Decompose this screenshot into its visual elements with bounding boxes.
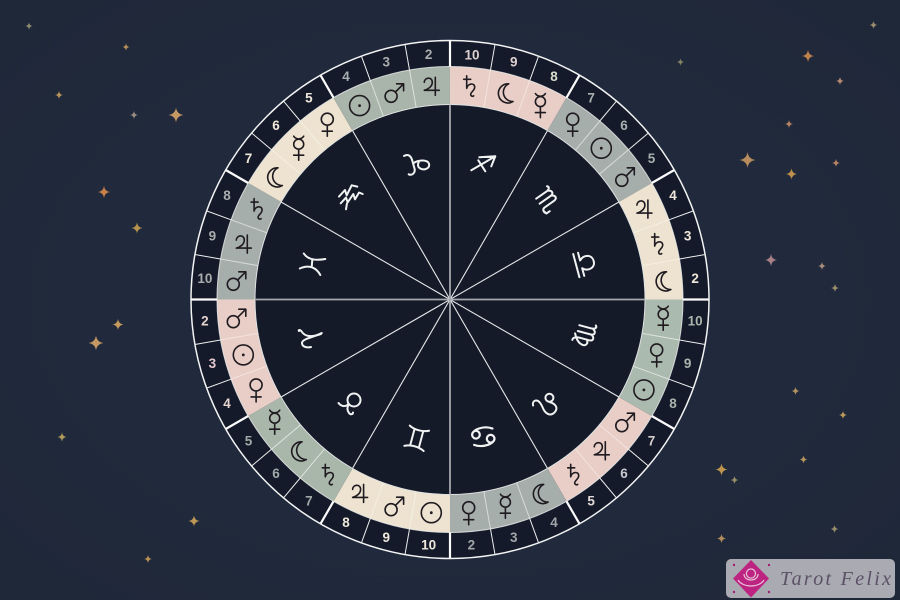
degree numbers band: 7 bbox=[245, 151, 252, 166]
icon: Gemini bbox=[404, 426, 429, 451]
icon: Jupiter bbox=[594, 442, 609, 460]
degree numbers band: 5 bbox=[305, 91, 313, 106]
icon: Venus bbox=[463, 502, 475, 525]
icon: Leo bbox=[531, 389, 562, 420]
icon: Aquarius bbox=[339, 185, 363, 209]
degree numbers band: 5 bbox=[648, 151, 656, 166]
degree numbers band: 4 bbox=[223, 396, 231, 411]
icon: Cancer bbox=[470, 425, 496, 448]
icon: Saturn bbox=[322, 464, 333, 485]
icon: Mars bbox=[385, 84, 404, 102]
icon: Venus bbox=[567, 113, 579, 136]
degree numbers band: 7 bbox=[648, 433, 655, 448]
degree numbers band: 10 bbox=[421, 537, 436, 552]
degree numbers band: 6 bbox=[620, 118, 628, 133]
degree numbers band: 2 bbox=[468, 537, 475, 552]
icon: Jupiter bbox=[637, 200, 652, 218]
degree numbers band: 5 bbox=[587, 494, 595, 509]
degree numbers band: 3 bbox=[510, 530, 518, 545]
ring sector 60-90: cream bbox=[596, 183, 710, 316]
icon: Virgo bbox=[572, 321, 597, 347]
degree numbers band: 9 bbox=[209, 228, 216, 244]
degree numbers band: 4 bbox=[342, 69, 350, 84]
icon: Mars bbox=[616, 413, 634, 432]
icon: Jupiter bbox=[424, 77, 439, 95]
degree numbers band: 3 bbox=[383, 55, 391, 70]
icon: Scorpio bbox=[533, 186, 560, 214]
icon: Pisces bbox=[300, 254, 325, 275]
icon: Mars bbox=[385, 497, 404, 516]
ring sector 0-30: rose bbox=[450, 66, 566, 131]
icon: Mars bbox=[227, 309, 246, 328]
degree numbers band: 6 bbox=[620, 466, 628, 481]
ring sector 150-180: grey bbox=[434, 446, 566, 560]
icon: Taurus bbox=[338, 394, 360, 414]
degree numbers band: 8 bbox=[342, 515, 350, 530]
icon: Moon bbox=[268, 168, 282, 187]
degree numbers band: 2 bbox=[691, 271, 699, 286]
degree numbers band: 8 bbox=[550, 69, 558, 84]
degree numbers band: 10 bbox=[197, 271, 212, 286]
icon: Saturn bbox=[251, 199, 262, 219]
icon: Mars bbox=[227, 272, 246, 290]
icon: Moon bbox=[498, 84, 513, 103]
icon: Libra bbox=[573, 249, 597, 277]
degree numbers band: 8 bbox=[223, 188, 231, 203]
ring sector 30-60: grey bbox=[534, 98, 667, 211]
degree numbers band: 7 bbox=[305, 494, 313, 509]
ring sector 120-150: rose bbox=[538, 384, 652, 517]
icon: Mercury bbox=[500, 494, 510, 518]
ring sector 90-120: sage bbox=[619, 300, 683, 416]
icon: Jupiter bbox=[353, 484, 368, 502]
degree numbers band: 6 bbox=[272, 466, 280, 481]
icon: Sun bbox=[233, 345, 253, 365]
icon: Venus bbox=[250, 379, 262, 402]
ring sector 330-360: sage grey bbox=[334, 39, 466, 153]
icon: Moon bbox=[533, 484, 548, 504]
logo icon: lotus diamond bbox=[733, 560, 770, 598]
degree numbers band: 2 bbox=[201, 314, 209, 329]
degree numbers band: 10 bbox=[688, 314, 703, 329]
logo badge bbox=[726, 559, 895, 598]
degree numbers band: 7 bbox=[587, 91, 595, 106]
degree numbers band: 9 bbox=[510, 55, 517, 70]
degree numbers band: 5 bbox=[245, 433, 253, 448]
icon: Saturn bbox=[464, 76, 475, 96]
icon: Sun bbox=[591, 138, 611, 158]
degree numbers band: 2 bbox=[425, 47, 432, 62]
icon: Mars bbox=[616, 168, 634, 186]
icon: Mercury bbox=[658, 306, 668, 330]
icon: Moon bbox=[292, 442, 306, 461]
icon: Aries bbox=[299, 330, 322, 347]
degree numbers band bbox=[197, 47, 703, 552]
degree numbers band: 4 bbox=[669, 188, 677, 203]
zodiac wheel bbox=[190, 39, 710, 560]
degree numbers band: 9 bbox=[684, 356, 691, 371]
icon: Saturn bbox=[568, 464, 579, 485]
icon: Sun bbox=[350, 96, 370, 116]
ring sector 300-330: cream bbox=[248, 82, 362, 215]
icon: Mercury bbox=[535, 94, 545, 118]
inner disc bbox=[255, 104, 645, 494]
wheel base disc and outer numbered band bbox=[191, 40, 709, 558]
icon: Saturn bbox=[652, 234, 663, 254]
icon: Mercury bbox=[294, 136, 304, 160]
degree numbers band: 9 bbox=[383, 530, 390, 545]
icon: Moon bbox=[656, 272, 671, 291]
logo text: Tarot Felix bbox=[780, 568, 893, 590]
logo background bbox=[726, 559, 895, 598]
zodiac signs bbox=[299, 155, 597, 451]
ring sector 240-270: rose bbox=[190, 283, 304, 416]
degree numbers band: 3 bbox=[684, 228, 692, 244]
icon: Sun bbox=[634, 380, 654, 400]
degree numbers band: 8 bbox=[669, 396, 677, 411]
degree numbers band: 10 bbox=[464, 47, 480, 62]
icon: Sagittarius bbox=[471, 156, 495, 171]
degree numbers band: 6 bbox=[272, 118, 280, 133]
icon: Sun bbox=[421, 503, 441, 523]
ring sector 180-210: cream bbox=[334, 468, 450, 532]
icon: Venus bbox=[321, 113, 333, 136]
icon: Jupiter bbox=[236, 235, 251, 253]
icon: Capricorn bbox=[404, 155, 429, 175]
icon: Venus bbox=[651, 344, 663, 367]
icon: Mercury bbox=[270, 410, 280, 434]
ring sector 270-300: grey bbox=[217, 183, 281, 300]
ring sector 210-240: sage bbox=[233, 388, 366, 501]
degree numbers band: 4 bbox=[550, 515, 558, 530]
degree numbers band: 3 bbox=[209, 356, 217, 371]
